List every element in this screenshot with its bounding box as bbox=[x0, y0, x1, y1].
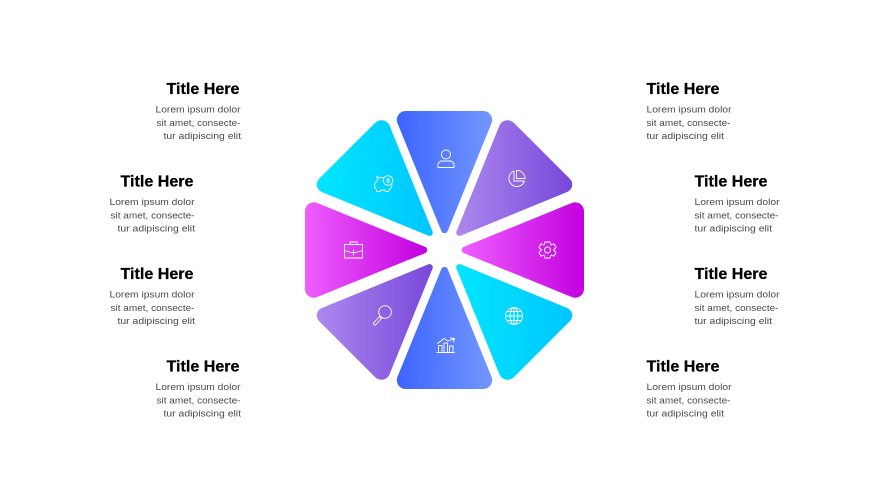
text block: right 3: Lorem ipsum dolor bbox=[694, 290, 780, 300]
segment: left magenta bbox=[305, 202, 427, 298]
text block: left 3: tur adipiscing elit bbox=[118, 316, 195, 327]
text block: left 1: sit amet, consecte- bbox=[156, 118, 240, 129]
text block: right 3: sit amet, consecte- bbox=[694, 303, 778, 314]
icon: pie chart bbox=[509, 170, 525, 186]
text block: right 1: Lorem ipsum dolor bbox=[646, 104, 732, 116]
segment: top left cyan bbox=[317, 120, 433, 236]
text block: right 3: tur adipiscing elit bbox=[694, 316, 772, 327]
text block: left 2 bbox=[110, 174, 195, 234]
text block: right 2: sit amet, consecte- bbox=[694, 210, 778, 222]
icon: growth chart bbox=[437, 338, 454, 352]
text block: left 1: Lorem ipsum dolor bbox=[156, 104, 241, 116]
text block: left 1: tur adipiscing elit bbox=[164, 131, 241, 142]
text block: left 4: tur adipiscing elit bbox=[164, 408, 241, 420]
text block: right 1: sit amet, consecte- bbox=[646, 118, 730, 129]
icon: gear bbox=[539, 242, 556, 258]
icon: piggy bank bbox=[375, 176, 393, 192]
text block: left 3: Title Here bbox=[120, 266, 194, 283]
text block: left 3 bbox=[110, 266, 195, 327]
text block: left 2: tur adipiscing elit bbox=[118, 224, 195, 234]
text block: right 2: Title Here bbox=[694, 174, 768, 190]
text block: right 4: Lorem ipsum dolor bbox=[646, 382, 732, 393]
text block: left 4: Title Here bbox=[166, 358, 240, 376]
text block: right 1: tur adipiscing elit bbox=[646, 131, 724, 142]
text block: left 4: sit amet, consecte- bbox=[156, 396, 240, 406]
text block: right 4: tur adipiscing elit bbox=[646, 408, 724, 420]
text block: left 1 bbox=[156, 81, 241, 142]
segment: right magenta bbox=[462, 202, 584, 298]
text block: left 3: Lorem ipsum dolor bbox=[110, 290, 195, 300]
segment: top right purple bbox=[456, 120, 572, 236]
text block: right 1: Title Here bbox=[646, 81, 720, 98]
text block: right 4 bbox=[646, 358, 732, 420]
icon: briefcase bbox=[344, 242, 362, 258]
text block: right 2 bbox=[694, 174, 780, 234]
text block: left 4 bbox=[156, 358, 241, 420]
text block: right 4: Title Here bbox=[646, 358, 720, 376]
segment: top blue bbox=[397, 111, 492, 233]
text block: right 3 bbox=[694, 266, 780, 327]
icon: magnifying glass bbox=[373, 306, 391, 325]
text block: left 3: sit amet, consecte- bbox=[110, 303, 194, 314]
segment: bottom right cyan bbox=[456, 264, 572, 380]
text block: right 4: sit amet, consecte- bbox=[646, 396, 730, 406]
segment: bottom blue bbox=[397, 267, 492, 389]
text block: right 1 bbox=[646, 81, 732, 142]
text block: right 2: Lorem ipsum dolor bbox=[694, 197, 780, 208]
text block: left 2: Lorem ipsum dolor bbox=[110, 197, 195, 208]
text block: right 3: Title Here bbox=[694, 266, 768, 283]
segment: bottom left purple bbox=[317, 264, 433, 380]
icon: person bbox=[438, 150, 454, 168]
text block: right 2: tur adipiscing elit bbox=[694, 224, 772, 234]
icon: globe bbox=[506, 308, 522, 324]
text block: left 1: Title Here bbox=[166, 81, 240, 98]
text block: left 2: Title Here bbox=[120, 174, 194, 190]
text block: left 4: Lorem ipsum dolor bbox=[156, 382, 241, 393]
text block: left 2: sit amet, consecte- bbox=[110, 210, 194, 222]
